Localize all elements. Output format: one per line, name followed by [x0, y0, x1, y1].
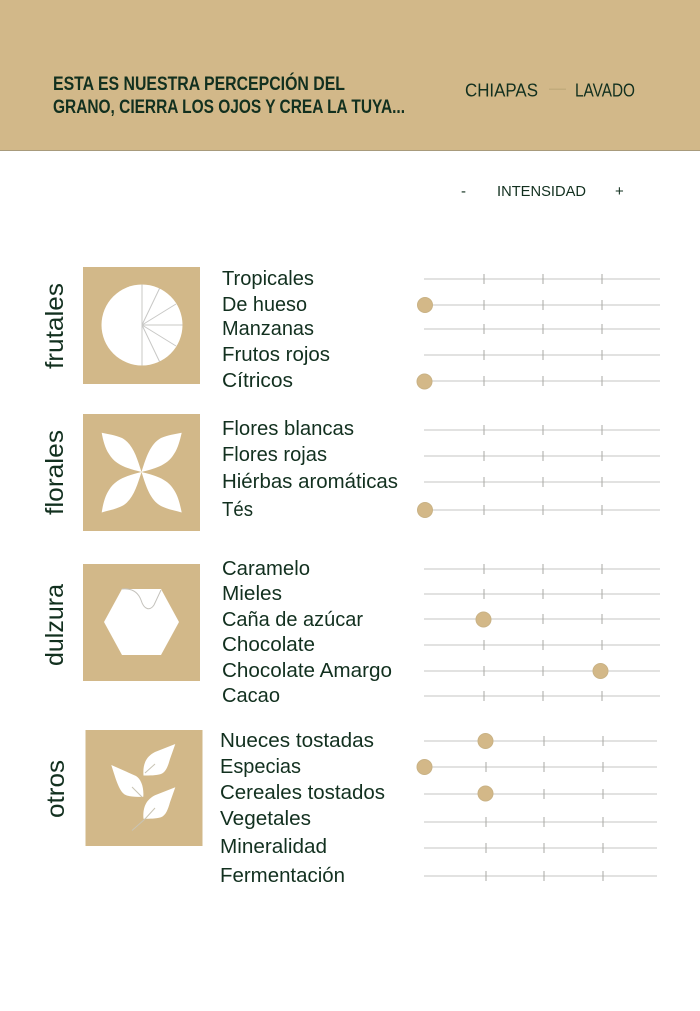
- panel: florales: [41, 414, 660, 531]
- flavor list: Especias: [220, 755, 301, 778]
- flavor list: Mineralidad: [220, 835, 327, 858]
- flavor list: [222, 557, 392, 707]
- intensity scale heading: -: [461, 183, 466, 200]
- heading: GRANO, CIERRA LOS OJOS Y CREA LA TUYA...: [53, 96, 405, 118]
- panel: otros: [42, 729, 657, 887]
- intensity scales: [424, 564, 660, 701]
- flavor list: Hiérbas aromáticas: [222, 470, 398, 493]
- flavor list: Caña de azúcar: [222, 608, 363, 631]
- icon: leaf branch: [86, 730, 202, 846]
- category label: dulzura: dulzura: [41, 584, 69, 666]
- header band: [0, 0, 700, 151]
- intensity scales: [417, 274, 660, 389]
- flavor list: [222, 267, 330, 392]
- flavor list: Mieles: [222, 582, 282, 605]
- flavor list: Flores blancas: [222, 417, 354, 440]
- flavor list: [222, 417, 398, 521]
- category label: florales: florales: [41, 430, 69, 515]
- intensity scale heading: INTENSIDAD: [497, 183, 586, 200]
- flavor list: Cítricos: [222, 369, 293, 392]
- flavor list: Fermentación: [220, 864, 345, 887]
- flavor list: De hueso: [222, 293, 307, 316]
- heading: [53, 71, 405, 118]
- intensity scales: [417, 734, 657, 881]
- flavor list: Cereales tostados: [220, 781, 385, 804]
- icon: honeycomb cell: [83, 564, 200, 681]
- intensity scale heading: [461, 183, 624, 200]
- flavor list: Tropicales: [222, 267, 314, 290]
- category label: frutales: frutales: [41, 283, 69, 369]
- icon: citrus slice: [83, 267, 200, 384]
- flavor list: Chocolate Amargo: [222, 659, 392, 682]
- category label: otros: otros: [42, 760, 70, 818]
- flavor list: Nueces tostadas: [220, 729, 374, 752]
- heading: ESTA ES NUESTRA PERCEPCIÓN DEL: [53, 71, 345, 95]
- panel: frutales: [41, 267, 660, 392]
- flavor list: Manzanas: [222, 317, 314, 340]
- flavor list: Frutos rojos: [222, 343, 330, 366]
- panel: dulzura: [41, 557, 660, 707]
- origin and process: [465, 80, 635, 100]
- origin and process: LAVADO: [575, 80, 635, 100]
- icon: flower petals: [83, 414, 200, 531]
- intensity scales: [418, 425, 660, 518]
- origin and process: CHIAPAS: [465, 80, 538, 100]
- flavor list: Flores rojas: [222, 443, 327, 466]
- flavor list: [220, 729, 385, 887]
- flavor list: Chocolate: [222, 633, 315, 656]
- flavor list: Cacao: [222, 684, 280, 707]
- intensity scale heading: +: [615, 183, 624, 200]
- flavor list: Caramelo: [222, 557, 310, 580]
- flavor list: Vegetales: [220, 807, 311, 830]
- flavor list: Tés: [222, 498, 253, 521]
